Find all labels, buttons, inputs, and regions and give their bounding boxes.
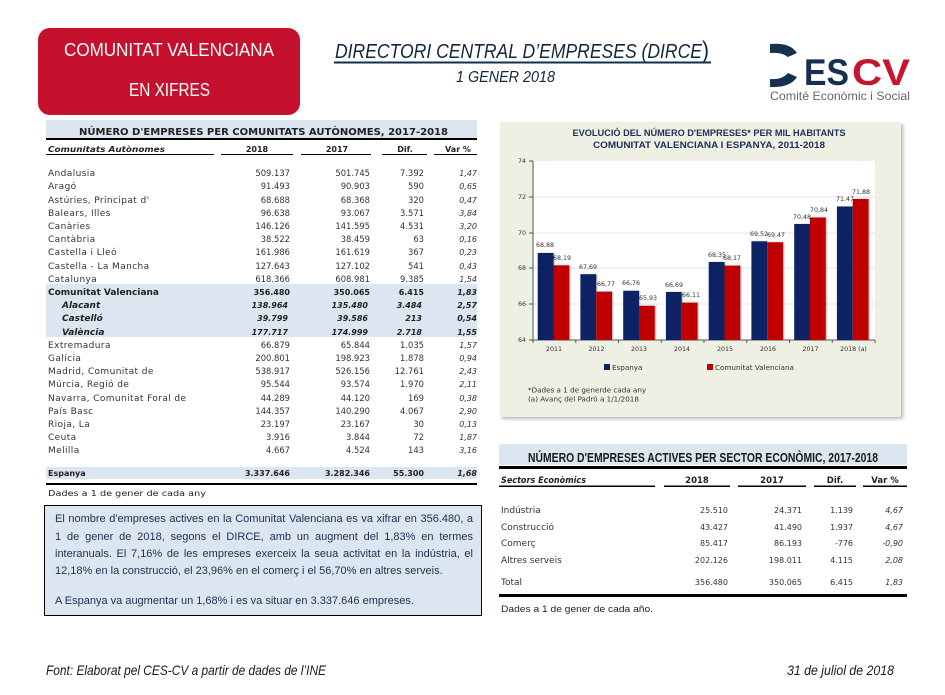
rows: 7.392	[400, 168, 424, 178]
band: Espanya total	[46, 467, 477, 479]
rows: 1,87	[459, 433, 478, 442]
data labels: 66,76	[622, 280, 640, 287]
rows: 3,16	[459, 446, 477, 455]
rows: 93.574	[341, 379, 370, 389]
x axis labels	[546, 346, 867, 353]
rows: 1,54	[459, 275, 477, 284]
rows: 3.282.346	[325, 469, 370, 478]
table column headers: Sectors Econòmics	[501, 475, 586, 486]
text box: summary: El nombre d'empreses actives en la Comunitat Valenciana es va xifrar en 356.480, a	[55, 513, 473, 525]
data labels: 71,47	[836, 196, 854, 203]
data labels: 66,11	[682, 292, 700, 299]
chart title: COMUNITAT VALENCIANA I ESPANYA, 2011-2018	[593, 140, 825, 150]
rows: València	[62, 327, 104, 338]
rows: 0,47	[459, 196, 478, 205]
rows: Indústria	[501, 506, 541, 516]
table: empreses per comunitats autònomes	[46, 120, 478, 498]
rows: Balears, Illes	[48, 209, 111, 219]
rows: 38.522	[261, 234, 290, 244]
rows: 200.801	[255, 353, 290, 363]
rows	[500, 506, 904, 588]
main title: DIRECTORI CENTRAL D’EMPRESES (DIRCE)	[335, 37, 709, 64]
plot area and axes: 66	[518, 301, 526, 308]
rows: 63	[413, 234, 424, 244]
text box: summary: A Espanya va augmentar un 1,68% i es va situar en 3.337.646 empreses.	[55, 595, 414, 607]
rows: 2,90	[459, 407, 477, 416]
rows: Alacant	[61, 301, 101, 311]
rows: 9.385	[400, 274, 424, 284]
rows: 320	[408, 195, 424, 205]
bars: Comunitat Valenciana	[554, 199, 868, 340]
data labels: 68,35	[708, 252, 726, 259]
logo: CES-CV: Comité Econòmic i Social	[770, 89, 910, 103]
rows: -0,90	[882, 539, 903, 548]
rows: 2,43	[459, 367, 477, 376]
rows: Galícia	[48, 354, 81, 364]
table column headers: 2018	[685, 476, 709, 486]
rows: 2,57	[457, 301, 477, 310]
rows: 23.167	[341, 419, 370, 429]
plot area and axes: 74	[518, 158, 526, 165]
rows: 3,20	[459, 222, 477, 231]
data labels: 69,47	[767, 232, 785, 239]
rows: 39.586	[337, 314, 368, 323]
table column headers: Var %	[445, 145, 471, 154]
rows: Total	[500, 578, 522, 588]
rows: 68.688	[261, 195, 290, 205]
rows: Múrcia, Regió de	[48, 379, 129, 390]
rows: 350.065	[334, 288, 370, 297]
rows: 4.115	[830, 556, 853, 565]
table title band	[499, 444, 907, 469]
rows: 350.065	[769, 578, 802, 587]
rows: Castelló	[62, 313, 103, 324]
rows: Astúries, Principat d'	[48, 196, 149, 206]
table column headers: 2018	[246, 145, 269, 154]
rows: 72	[413, 432, 424, 442]
rows: 55.300	[393, 469, 424, 478]
plot area and axes: 64	[518, 337, 526, 344]
logo: CES-CV: CV	[852, 52, 910, 93]
rows: 68.368	[341, 195, 370, 205]
rows: 177.717	[252, 328, 288, 337]
rows: 43.427	[700, 523, 728, 532]
text box: summary	[44, 505, 482, 616]
chart notes: *Dades a 1 de generde cada any	[528, 386, 647, 394]
rows: 3,84	[459, 209, 477, 218]
text box: summary: 1 de gener de 2018, segons el DIRCE, amb un augment del 1,83% en termes	[55, 531, 473, 543]
table note: Dades a 1 de gener de cada año.	[501, 604, 653, 615]
data labels: 70,84	[810, 207, 828, 214]
rows: 6.415	[399, 288, 424, 297]
table column headers: Comunitats Autònomes	[48, 144, 165, 154]
rows: 85.417	[700, 539, 728, 548]
x axis labels: 2017	[802, 346, 819, 353]
data labels: 71,88	[852, 189, 870, 196]
table title band	[46, 120, 477, 140]
rows: 3.916	[266, 432, 290, 442]
rows: 39.799	[257, 314, 288, 323]
rows: Catalunya	[48, 275, 97, 285]
footer: source: Font: Elaborat pel CES-CV a partir de dades de l’INE	[46, 662, 327, 678]
rows: 96.638	[261, 208, 290, 218]
plot area and axes: 72	[518, 194, 526, 201]
logo: CES-CV	[770, 44, 910, 103]
rows: 541	[408, 261, 424, 271]
data labels: 69,52	[750, 231, 768, 238]
rows: 367	[408, 247, 424, 257]
rows: 95.544	[261, 379, 290, 389]
chart title	[572, 127, 846, 150]
rows: 161.619	[335, 247, 370, 257]
rows: 0,65	[459, 182, 477, 191]
bars: Espanya	[538, 206, 853, 340]
rows: 66.879	[261, 340, 290, 350]
rows: 4.531	[400, 221, 424, 231]
table column headers: 2017	[760, 476, 784, 486]
rows: Construcció	[501, 522, 555, 533]
rows: Madrid, Comunitat de	[48, 367, 154, 377]
rows: 4.667	[266, 445, 290, 455]
rows: Castella i Lleó	[48, 247, 117, 258]
rows: 38.459	[341, 234, 370, 244]
rows: 86.193	[774, 539, 802, 548]
rows: 1.970	[400, 379, 424, 389]
data labels	[536, 189, 870, 302]
text box: summary: interanuals. El 7,16% de les empreses exerceix la seua activitat en la indústria, el	[55, 548, 473, 560]
table column headers: Dif.	[397, 145, 413, 154]
rows: 4,67	[885, 523, 904, 532]
rows: 0,43	[459, 262, 477, 271]
table title band: NÚMERO D'EMPRESES ACTIVES PER SECTOR ECONÒMIC, 2017-2018	[528, 450, 878, 465]
rows: 0,23	[459, 248, 477, 257]
rows: 12.761	[395, 366, 424, 376]
rows: Melilla	[48, 446, 80, 456]
rows: 618.366	[255, 274, 290, 284]
chart notes: (a) Avanç del Padró a 1/1/2018	[528, 394, 639, 404]
table column headers	[46, 144, 477, 155]
rows: Rioja, La	[48, 420, 90, 430]
header badge: Comunitat Valenciana en xifres: COMUNITAT VALENCIANA	[64, 39, 275, 60]
x axis labels: 2018 (a)	[840, 346, 867, 353]
header badge: Comunitat Valenciana en xifres: EN XIFRES	[129, 79, 210, 100]
rows: 161.986	[255, 247, 290, 257]
rows: 146.126	[255, 221, 290, 231]
rows: 90.903	[341, 181, 370, 191]
rows: 202.126	[695, 556, 728, 565]
data labels: 68,19	[553, 255, 571, 262]
logo: CES-CV: ES	[804, 52, 849, 93]
rows: País Basc	[48, 407, 94, 417]
rows: 44.120	[341, 393, 370, 403]
rows: 143	[408, 445, 424, 455]
data labels: 68,17	[723, 255, 741, 262]
x axis labels: 2012	[588, 346, 605, 353]
rows	[48, 168, 478, 478]
rows: Castella - La Mancha	[48, 262, 150, 272]
rows: 0,94	[459, 354, 477, 363]
rows: 4.067	[400, 406, 424, 416]
header badge: Comunitat Valenciana en xifres	[38, 28, 300, 115]
rows: 3.571	[400, 208, 424, 218]
data labels: 66,69	[665, 282, 683, 289]
rows: 1.035	[400, 340, 424, 350]
rows: 356.480	[695, 578, 728, 587]
x axis labels: 2015	[717, 346, 733, 353]
rows: 0,38	[459, 394, 477, 403]
legend: Espanya	[612, 363, 642, 372]
rows: 23.197	[261, 419, 290, 429]
rows: 30	[413, 419, 424, 429]
rows: 1,83	[885, 578, 903, 587]
rows: 0,16	[459, 235, 477, 244]
text box: summary: 12,18% en la construcció, el 23,96% en el comerç i el 56,70% en altres serveis.	[55, 565, 443, 577]
rows: 1.937	[830, 523, 853, 532]
rows: 2.718	[397, 328, 422, 337]
rows: 93.067	[341, 208, 370, 218]
rows: 135.480	[332, 301, 368, 310]
data labels: 65,93	[639, 295, 657, 302]
chart panel: evolució del número d'empreses	[500, 122, 901, 417]
rows: 1.878	[400, 353, 424, 363]
table column headers: Var %	[871, 476, 899, 486]
table column headers: Dif.	[827, 476, 843, 486]
data labels: 66,77	[597, 281, 615, 288]
rows: 169	[408, 393, 424, 403]
rows: 144.357	[255, 406, 290, 416]
rows: 526.156	[335, 366, 370, 376]
rows: 590	[408, 181, 424, 191]
data labels: 67,69	[579, 264, 597, 271]
table title band: NÚMERO D'EMPRESES PER COMUNITATS AUTÒNOMES, 2017-2018	[79, 126, 448, 138]
main title: 1 GENER 2018	[456, 69, 555, 86]
rows: 501.745	[335, 168, 370, 178]
rows: 25.510	[700, 506, 728, 515]
chart title: EVOLUCIÓ DEL NÚMERO D'EMPRESES* PER MIL HABITANTS	[572, 127, 846, 138]
legend	[604, 363, 794, 372]
plot area and axes: 68	[518, 265, 526, 272]
rows: 65.844	[341, 340, 370, 350]
rows: 24.371	[774, 506, 802, 515]
footer: date: 31 de juliol de 2018	[787, 662, 894, 678]
rows: 3.844	[346, 432, 370, 442]
rows: 127.643	[255, 261, 290, 271]
rows: Navarra, Comunitat Foral de	[48, 394, 187, 404]
main title	[334, 37, 711, 86]
rows: 1,68	[457, 469, 477, 478]
rows: 6.415	[830, 578, 853, 587]
rows: 3.484	[397, 301, 422, 310]
rows: Altres serveis	[501, 556, 562, 566]
rows: Comunitat Valenciana	[48, 288, 159, 298]
rows: 44.289	[261, 393, 290, 403]
rows: 2,11	[459, 380, 477, 389]
rows: 2,08	[885, 556, 903, 565]
rows: 198.923	[335, 353, 370, 363]
rows: 127.102	[335, 261, 370, 271]
x axis labels: 2011	[546, 346, 562, 353]
table: empreses actives per sector econòmic	[499, 444, 907, 615]
highlighted band: Comunitat Valenciana	[46, 284, 477, 337]
rows: 213	[405, 314, 422, 323]
rows: Canàries	[48, 222, 91, 232]
rows: Extremadura	[48, 341, 111, 351]
rows: 1,83	[457, 288, 477, 297]
chart notes	[528, 386, 647, 404]
rows: 4.524	[346, 445, 370, 455]
rows: 198.011	[769, 556, 802, 565]
rows: Comerç	[501, 539, 536, 549]
rows: 1.139	[830, 506, 853, 515]
plot area and axes: 70	[518, 230, 526, 237]
rows: 608.981	[335, 274, 370, 284]
x axis labels: 2016	[760, 346, 776, 353]
rows: 91.493	[261, 181, 290, 191]
rows: 1,55	[457, 328, 477, 337]
table note: Dades a 1 de gener de cada any	[48, 489, 206, 498]
rows: 1,47	[459, 169, 478, 178]
rows: Andalusia	[48, 169, 96, 179]
plot area and axes	[518, 158, 875, 344]
rows: Aragó	[48, 181, 77, 192]
rows: 509.137	[255, 168, 290, 178]
rows: Cantàbria	[48, 235, 96, 245]
rows: 0,13	[459, 420, 477, 429]
legend: Comunitat Valenciana	[715, 363, 794, 372]
data labels: 68,88	[536, 242, 554, 249]
rows: 140.290	[335, 406, 370, 416]
rows: 0,54	[457, 314, 477, 323]
rows: Espanya	[48, 469, 86, 478]
rows: 1,57	[459, 341, 478, 350]
x axis labels: 2014	[674, 346, 690, 353]
rows: 174.999	[332, 328, 368, 337]
table column headers	[499, 475, 907, 487]
x axis labels: 2013	[631, 346, 647, 353]
rows: 138.964	[252, 301, 288, 310]
rows: Ceuta	[48, 433, 77, 443]
data labels: 70,48	[793, 214, 811, 221]
rows: 41.490	[774, 523, 802, 532]
table column headers: 2017	[326, 145, 348, 154]
rows: -776	[835, 539, 853, 548]
rows: 4,67	[885, 506, 904, 515]
rows: 141.595	[335, 221, 370, 231]
rows: 356.480	[254, 288, 290, 297]
rows: 3.337.646	[245, 469, 290, 478]
rows: 538.917	[255, 366, 290, 376]
